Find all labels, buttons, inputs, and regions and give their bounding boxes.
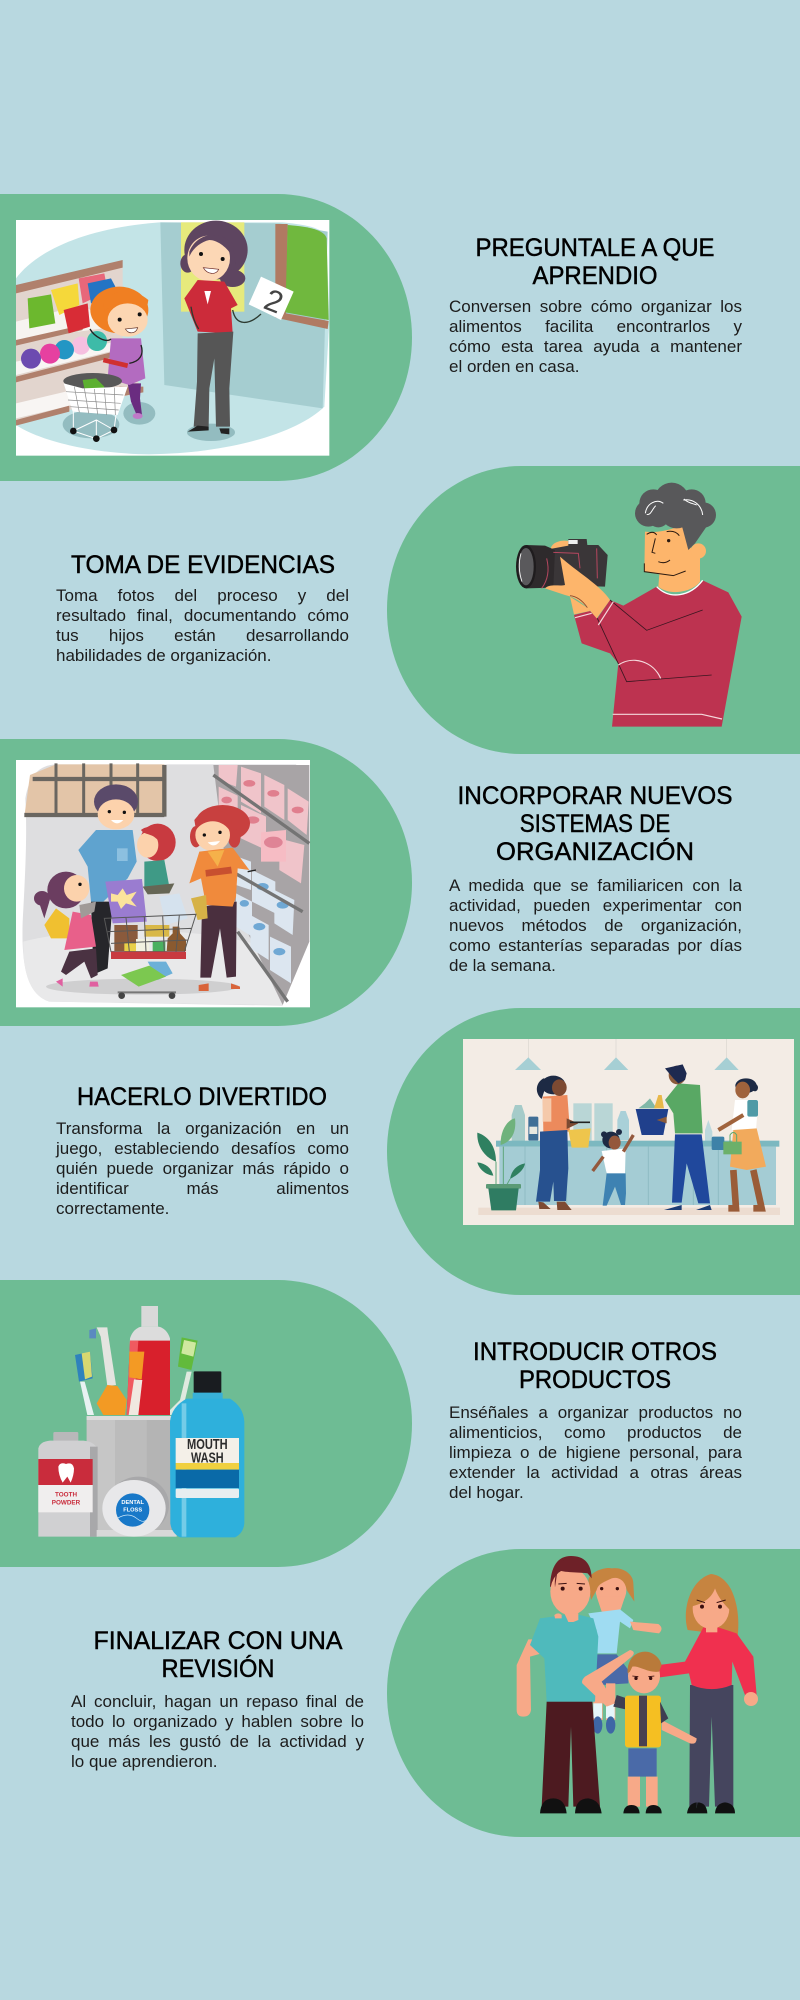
body text: correctamente.: [56, 1199, 169, 1218]
body text: el orden en casa.: [449, 357, 579, 376]
heading: INTRODUCIR OTROS: [473, 1338, 717, 1366]
illustration: dental hygiene products: MOUTH: [187, 1437, 228, 1453]
body text: [449, 297, 742, 376]
body text: de la semana.: [449, 956, 556, 975]
illustration: dental hygiene products: POWDER: [52, 1500, 81, 1507]
illustration: dental hygiene products: FLOSS: [123, 1508, 142, 1514]
body text: cómo esta tarea ayuda a mantener: [449, 337, 742, 356]
body text: quién puede organizar más rápido o: [56, 1159, 349, 1178]
body text: [449, 1403, 742, 1502]
body text: tus hijos están desarrollando: [56, 626, 349, 645]
body text: Conversen sobre cómo organizar los: [449, 297, 742, 316]
heading: HACERLO DIVERTIDO: [77, 1083, 327, 1111]
heading: FINALIZAR CON UNA: [94, 1627, 343, 1655]
illustration: mother and girl shopping at shelves: [16, 220, 330, 456]
body text: identificar más alimentos: [56, 1179, 349, 1198]
illustration: man taking photo with camera: [516, 482, 742, 727]
panel: green rounded shape right: [387, 466, 800, 754]
illustration: family with shopping cart in supermarket: [16, 760, 310, 1008]
heading: PRODUCTOS: [519, 1366, 671, 1394]
body text: como estanterías separadas por días: [449, 936, 742, 955]
heading: [458, 782, 732, 866]
panel: green rounded shape right: [387, 1549, 800, 1837]
body text: extender la actividad a otras áreas: [449, 1463, 742, 1482]
body text: juego, estableciendo desafíos como: [56, 1139, 349, 1158]
heading: ORGANIZACIÓN: [496, 837, 694, 866]
body text: alimentos facilita encontrarlos y: [449, 317, 742, 336]
illustration: dental hygiene products: DENTAL: [121, 1500, 144, 1506]
section 2: toma de evidencias: [56, 466, 800, 754]
panel: green rounded shape left: [0, 1280, 412, 1567]
body text: A medida que se familiaricen con la: [449, 876, 742, 895]
body text: limpieza o de higiene personal, para: [449, 1443, 742, 1462]
panel: green rounded shape left: [0, 739, 412, 1026]
body text: Al concluir, hagan un repaso final de: [71, 1692, 364, 1711]
heading: TOMA DE EVIDENCIAS: [70, 551, 334, 579]
heading: SISTEMAS DE: [520, 810, 670, 838]
illustration: family organizing in kitchen: [463, 1039, 794, 1225]
body text: Enséñales a organizar productos no: [449, 1403, 742, 1422]
body text: [71, 1692, 364, 1771]
illustration: dental hygiene products: [38, 1306, 244, 1538]
section 1: preguntale a que aprendio: [0, 194, 742, 481]
heading: INCORPORAR NUEVOS: [458, 782, 732, 810]
section 3: incorporar nuevos sistemas: [0, 739, 742, 1026]
illustration: mother and girl shopping at shelves: 2: [259, 283, 288, 321]
illustration: family of four standing: [516, 1556, 758, 1814]
illustration: dental hygiene products: TOOTH: [55, 1492, 77, 1499]
body text: Transforma la organización en un: [56, 1119, 349, 1138]
panel: green rounded shape left: [0, 194, 412, 481]
body text: resultado final, documentando cómo: [56, 606, 349, 625]
body text: [56, 1119, 349, 1218]
section 6: finalizar con una revision: [71, 1549, 800, 1837]
heading: [473, 1338, 717, 1394]
body text: [449, 876, 742, 975]
body text: lo que aprendieron.: [71, 1752, 218, 1771]
body text: alimenticios, como productos de: [449, 1423, 742, 1442]
body text: actividad, pueden experimentar con: [449, 896, 742, 915]
body text: todo lo organizado y hablen sobre lo: [71, 1712, 364, 1731]
heading: [476, 234, 714, 290]
body text: que más les gustó de la actividad y: [71, 1732, 364, 1751]
heading: [94, 1627, 343, 1683]
panel: green rounded shape right: [387, 1008, 800, 1295]
body text: Toma fotos del proceso y del: [56, 586, 349, 605]
body text: [56, 586, 349, 665]
body text: habilidades de organización.: [56, 646, 272, 665]
body text: nuevos métodos de organización,: [449, 916, 742, 935]
heading: PREGUNTALE A QUE: [476, 234, 714, 262]
section 5: introducir otros productos: [0, 1280, 742, 1567]
heading: APRENDIO: [532, 262, 658, 290]
section 4: hacerlo divertido: [56, 1008, 800, 1295]
illustration: dental hygiene products: WASH: [191, 1450, 224, 1466]
heading: REVISIÓN: [162, 1654, 274, 1683]
body text: del hogar.: [449, 1483, 524, 1502]
